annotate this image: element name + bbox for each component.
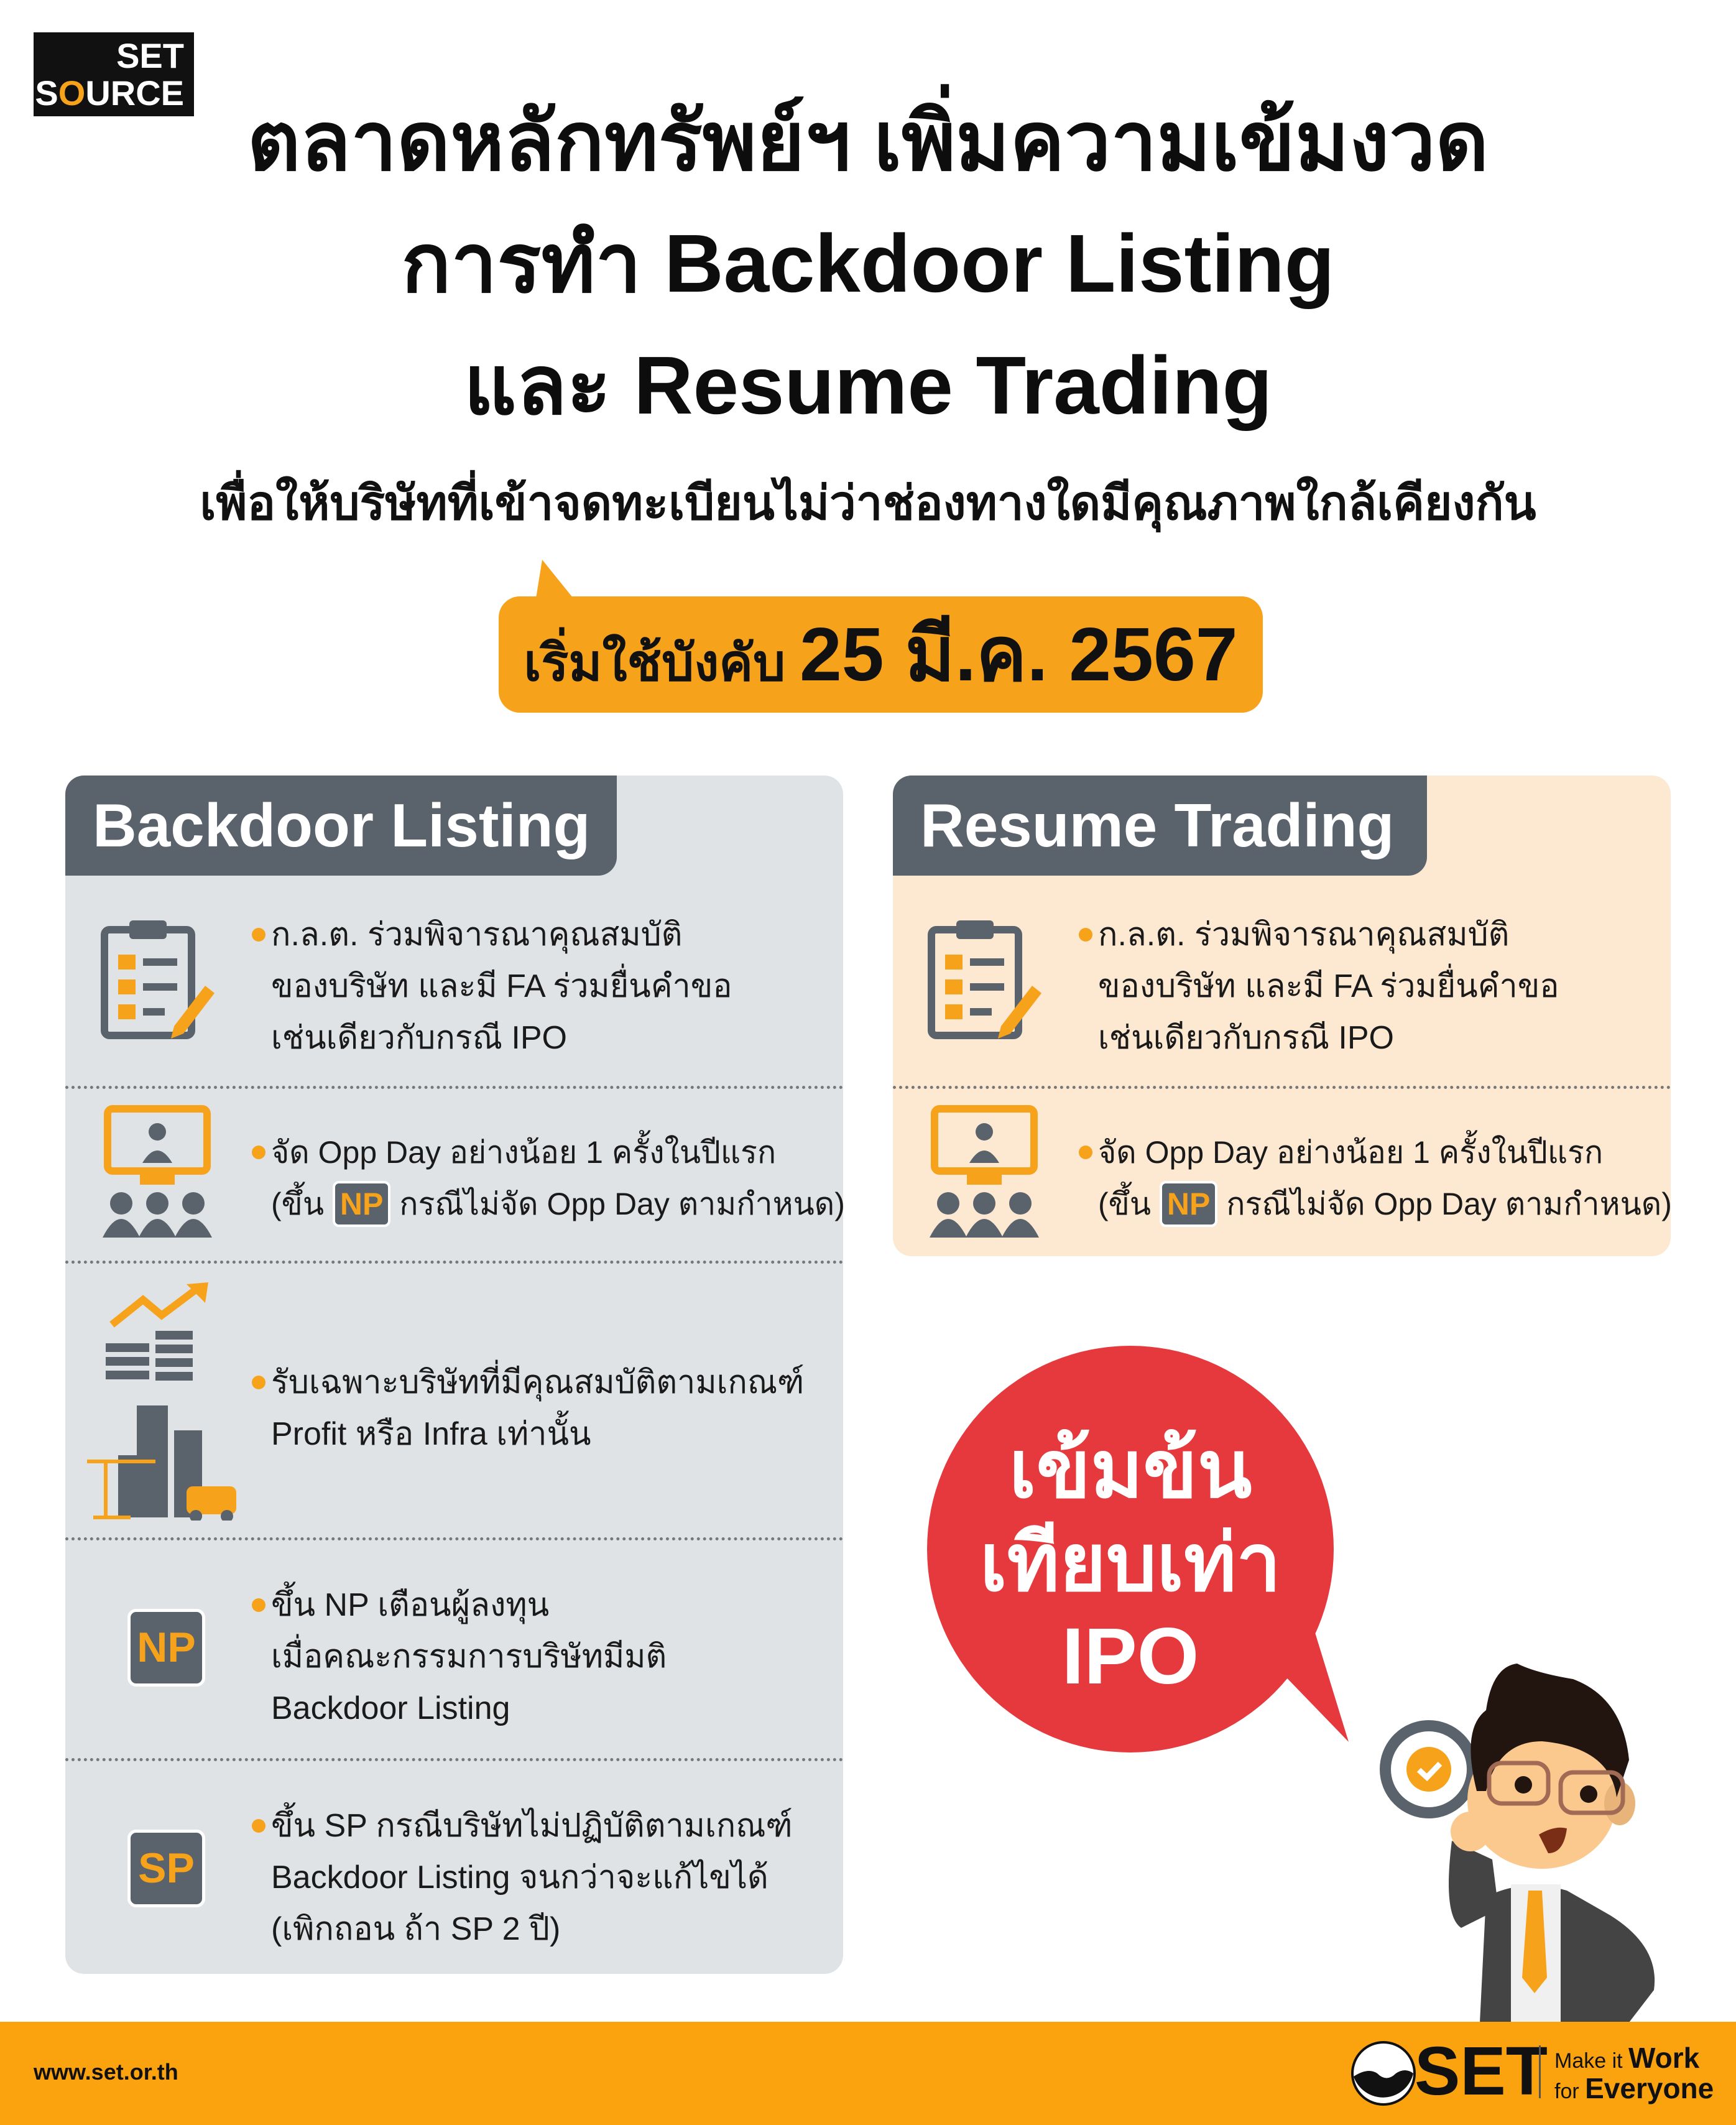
text: row 1: ของบริษัท และมี FA ร่วมยื่นคำขอ xyxy=(271,968,732,1004)
logo: SET Make it Work for Everyone xyxy=(1351,2033,1714,2109)
heading: Resume Trading xyxy=(893,775,1427,876)
text: row 1 xyxy=(252,917,732,1056)
text: resume row 1: ของบริษัท และมี FA ร่วมยื่นคำขอ xyxy=(1098,968,1559,1004)
icon: presentation xyxy=(930,1105,1039,1238)
text: resume row 1: เช่นเดียวกับกรณี IPO xyxy=(1098,1020,1394,1056)
icon: checklist xyxy=(101,920,215,1039)
heading: Resume Trading: Resume Trading xyxy=(920,791,1394,859)
text: row 2 xyxy=(252,1130,845,1227)
text: row 5: ขึ้น SP กรณีบริษัทไม่ปฏิบัติตามเกณฑ์ xyxy=(271,1808,793,1844)
text: row 3: Profit หรือ Infra เท่านั้น xyxy=(271,1416,591,1452)
icon: SP: SP xyxy=(138,1845,195,1892)
text: row 3: รับเฉพาะบริษัทที่มีคุณสมบัติตามเกณฑ์ xyxy=(271,1364,804,1400)
text: row 4: เมื่อคณะกรรมการบริษัทมีมติ xyxy=(271,1639,667,1675)
footer xyxy=(0,2022,1736,2125)
panel: Backdoor Listing xyxy=(65,775,843,1974)
text: row 3 xyxy=(252,1359,804,1452)
text: row 5: Backdoor Listing จนกว่าจะแก้ไขได้ xyxy=(271,1859,769,1896)
text: row 4: Backdoor Listing xyxy=(271,1690,510,1726)
icon: businessman with magnifier xyxy=(1380,1664,1655,2022)
icon: growth and buildings xyxy=(87,1282,236,1521)
badge: effective date: เริ่มใช้บังคับ 25 มี.ค. 2567 xyxy=(524,612,1238,697)
icon: SP xyxy=(127,1830,205,1907)
callout: speech bubble xyxy=(927,1346,1349,1752)
title xyxy=(247,84,1489,431)
text: website: www.set.or.th xyxy=(34,2059,178,2085)
text: resume row 2: (ขึ้น กรณีไม่จัด Opp Day ตามกำหนด) xyxy=(1098,1187,1672,1221)
text: row 2: (ขึ้น กรณีไม่จัด Opp Day ตามกำหนด) xyxy=(271,1187,845,1221)
subtitle: เพื่อให้บริษัทที่เข้าจดทะเบียนไม่ว่าช่องทางใดมีคุณภาพใกล้เคียงกัน xyxy=(200,477,1536,530)
text: row 1: ก.ล.ต. ร่วมพิจารณาคุณสมบัติ xyxy=(271,917,682,953)
callout: speech bubble: เทียบเท่า xyxy=(980,1519,1281,1608)
title: ตลาดหลักทรัพย์ฯ เพิ่มความเข้มงวด xyxy=(247,96,1489,187)
text: row 2: จัด Opp Day อย่างน้อย 1 ครั้งในปีแรก xyxy=(271,1135,776,1170)
text: resume row 1: ก.ล.ต. ร่วมพิจารณาคุณสมบัติ xyxy=(1098,917,1509,953)
icon: checklist xyxy=(928,920,1041,1039)
logo: SET Make it Work for Everyone: Make it Work xyxy=(1554,2042,1699,2074)
text: resume row 1 xyxy=(1079,917,1559,1056)
text: row 1: เช่นเดียวกับกรณี IPO xyxy=(271,1020,567,1056)
callout: speech bubble: เข้มข้น xyxy=(1009,1425,1252,1514)
callout: speech bubble: IPO xyxy=(1062,1612,1199,1701)
heading: Backdoor Listing xyxy=(65,775,617,876)
text: resume row 2: จัด Opp Day อย่างน้อย 1 ครั้งในปีแรก xyxy=(1098,1135,1603,1170)
text: row 5: (เพิกถอน ถ้า SP 2 ปี) xyxy=(271,1911,560,1947)
logo: SET Make it Work for Everyone: SET xyxy=(1415,2033,1548,2109)
logo: SET SOURCE: SET xyxy=(116,36,184,75)
title: การทำ Backdoor Listing xyxy=(402,218,1334,309)
text: row 2: NP xyxy=(340,1187,383,1221)
text: row 4: ขึ้น NP เตือนผู้ลงทุน xyxy=(271,1587,549,1623)
title: และ Resume Trading xyxy=(464,340,1272,431)
icon: presentation xyxy=(103,1105,212,1238)
text: resume row 2 xyxy=(1079,1130,1672,1227)
logo: SET SOURCE xyxy=(34,32,194,116)
badge: effective date xyxy=(499,560,1263,713)
logo: SET Make it Work for Everyone: for Everyone xyxy=(1554,2072,1714,2104)
panel: Resume Trading xyxy=(893,775,1671,1256)
icon: NP: NP xyxy=(137,1624,196,1671)
text: row 5 xyxy=(252,1802,793,1947)
text: row 4 xyxy=(252,1581,667,1726)
heading: Backdoor Listing: Backdoor Listing xyxy=(93,791,590,859)
text: resume row 2: NP xyxy=(1167,1187,1210,1221)
icon: NP xyxy=(127,1609,205,1687)
logo: SET SOURCE: SOURCE xyxy=(35,73,184,113)
